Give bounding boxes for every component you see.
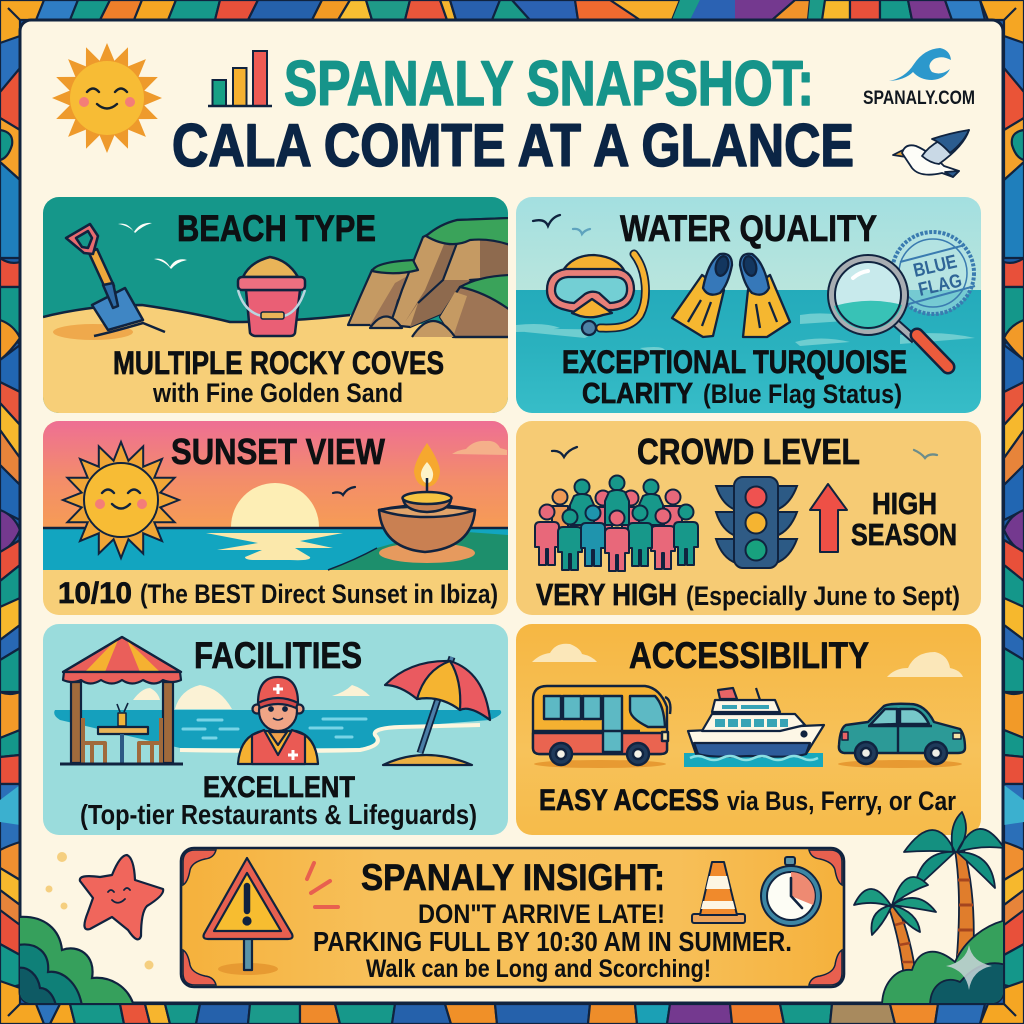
icon: small bird [333, 487, 355, 495]
icon: candle bowl [379, 443, 475, 563]
logo: Spanaly wave: SPANALY.COM [863, 88, 975, 109]
text: high season [851, 486, 957, 552]
text: facilities value [80, 771, 477, 830]
text: high season: SEASON [851, 517, 957, 552]
icon: blue flag stamp [892, 232, 975, 314]
text: facilities value: (Top-tier Restaurants & Lifeguards) [80, 799, 477, 830]
text: insight heading: SPANALY INSIGHT: [361, 857, 665, 898]
heading: facilities: FACILITIES [194, 635, 362, 676]
text: insight body [313, 899, 792, 983]
panel: accessibility [516, 624, 981, 835]
icon: traffic cone [692, 862, 745, 923]
text: sunset rating [58, 577, 498, 610]
alert dashes [307, 863, 338, 907]
beach sea scene [54, 685, 501, 751]
text: water quality value: EXCEPTIONAL TURQUOISE [562, 344, 907, 380]
left foliage [18, 917, 134, 1006]
logo: Spanaly wave [863, 48, 975, 109]
text: facilities value: EXCELLENT [203, 771, 355, 804]
icon: bus [533, 686, 670, 768]
panel: sunset view [43, 421, 508, 615]
icon: starfish [80, 855, 163, 939]
sand and shoreline [43, 305, 508, 413]
icon: rocky cliffs [348, 218, 510, 337]
icon: smiling sun [52, 43, 162, 153]
panel: crowd level [516, 421, 981, 615]
text: beach type value: MULTIPLE ROCKY COVES [113, 345, 444, 381]
icon: crowd of people [535, 476, 698, 571]
icon: lifeguard [238, 677, 318, 764]
heading: beach type: BEACH TYPE [177, 208, 376, 249]
icon: birds [552, 447, 937, 458]
title: CALA COMTE AT A GLANCE [172, 112, 854, 179]
icon: white birds [118, 223, 187, 269]
text: accessibility value: via Bus, Ferry, or Car [727, 786, 956, 816]
icon: tall palm [903, 811, 1002, 959]
icon: seagull [893, 130, 969, 177]
icon: bar chart [208, 51, 272, 106]
panel: water quality [516, 197, 981, 413]
decorative sand dots [46, 852, 154, 970]
panel: beach type [43, 197, 510, 413]
title: SPANALY SNAPSHOT: [284, 49, 814, 119]
bush [882, 920, 1006, 1006]
corner ornaments [183, 850, 842, 985]
text: insight body: PARKING FULL BY 10:30 AM IN SUMMER. [313, 926, 792, 957]
title [172, 49, 854, 179]
icon: warning sign [204, 858, 292, 975]
text: high season: HIGH [872, 486, 937, 521]
text: water quality value: (Blue Flag Status) [703, 379, 902, 409]
text: insight body: Walk can be Long and Scorching! [366, 955, 711, 983]
text: water quality value: CLARITY [582, 378, 693, 410]
heading: crowd level: CROWD LEVEL [637, 431, 860, 472]
text: beach type value: with Fine Golden Sand [152, 378, 403, 408]
icon: swim fins [672, 254, 790, 337]
icon: ferry [684, 688, 824, 767]
sunset scene [43, 421, 508, 570]
icon: clouds [532, 644, 963, 677]
sea [516, 290, 981, 413]
icon: blue flag stamp: FLAG [916, 271, 964, 301]
icon: small palm [854, 877, 936, 978]
icon: beach gazebo [60, 637, 183, 764]
icon: stopwatch [761, 857, 821, 926]
icon: up arrow [810, 484, 847, 552]
text: beach type value [113, 345, 444, 408]
icon: smiling sun [63, 442, 179, 558]
icon: birds [533, 215, 560, 226]
text: crowd value [536, 577, 960, 612]
heading: accessibility: ACCESSIBILITY [629, 635, 869, 676]
heading: water quality: WATER QUALITY [620, 208, 877, 249]
icon: car [838, 704, 965, 768]
text: accessibility value [539, 784, 956, 817]
text: accessibility value: EASY ACCESS [539, 784, 719, 817]
text: sunset rating: (The BEST Direct Sunset in Ibiza) [140, 579, 498, 609]
icon: sand bucket [238, 257, 305, 336]
icon: magnifying glass [828, 255, 948, 367]
heading: sunset view: SUNSET VIEW [171, 431, 385, 472]
text: sunset rating: 10/10 [58, 577, 132, 610]
text: insight body: DON"T ARRIVE LATE! [418, 899, 665, 929]
text: water quality value [562, 344, 907, 410]
text: crowd value: VERY HIGH [536, 577, 677, 612]
text: crowd value: (Especially June to Sept) [686, 581, 960, 611]
icon: blue flag stamp: BLUE [911, 252, 959, 282]
icon: traffic light [716, 477, 797, 568]
icon: sparkle [946, 945, 992, 990]
icon: snorkel mask [547, 254, 645, 335]
right palms and foliage [854, 812, 1006, 1006]
icon: shovel [66, 224, 165, 336]
panel: facilities [43, 624, 508, 835]
panel: Spanaly insight [181, 848, 844, 987]
icon: beach umbrella [383, 657, 490, 765]
